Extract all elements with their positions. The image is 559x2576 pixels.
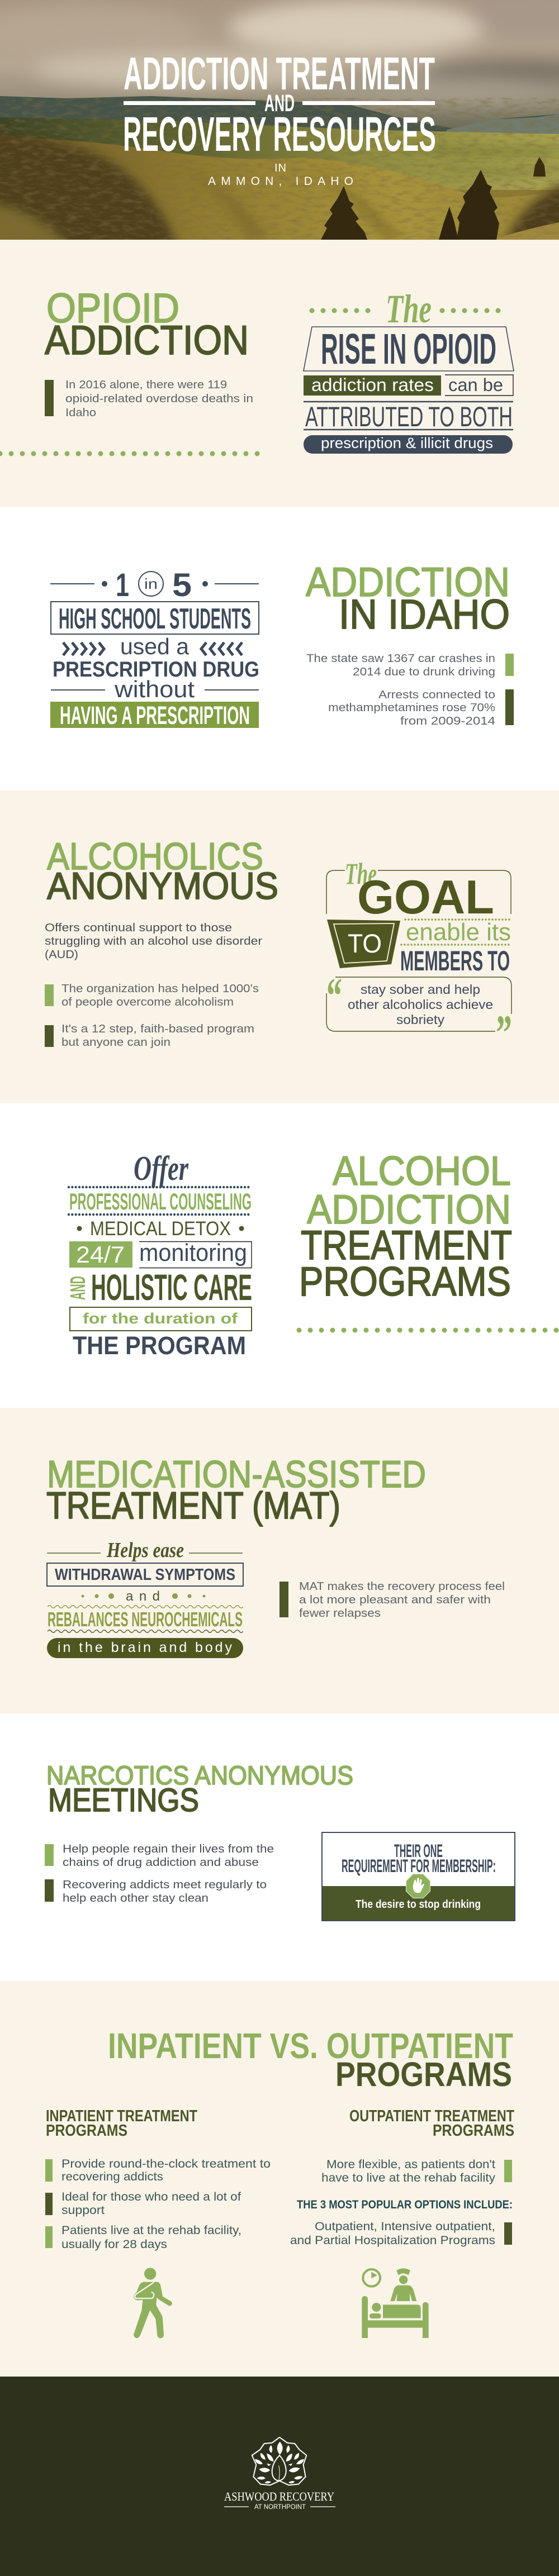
fact: ideal for: support [61,2204,105,2217]
typographic callout: offer: Offer [134,1150,189,1188]
typographic callout: the goal: The [345,857,377,891]
stat: meth arrests: from 2009-2014 [400,715,495,727]
fact: options list: and Partial Hospitalization Programs [290,2234,495,2247]
subheading: inpatient: PROGRAMS [46,2122,127,2140]
heading: alcohol addiction treatment programs: ALCOHOL [333,1149,511,1194]
heading: addiction in Idaho: IN IDAHO [339,591,510,637]
logo: Ashwood Recovery lotus [252,2437,306,2485]
typographic callout: offer: THE PROGRAM [73,1331,246,1360]
stat: overdose deaths: In 2016 alone, there were 119 [65,378,227,391]
stat: meth arrests [328,688,514,727]
typographic callout: 1 in 5: in [144,575,158,592]
typographic callout: rise in opioid [304,287,514,454]
fact: round the clock: Provide round-the-clock treatment to [61,2158,271,2170]
fact: meet regularly: help each other stay clean [63,1892,209,1904]
panel: alcohol addiction treatment programs [0,1103,559,1408]
panel: medication-assisted treatment [0,1408,559,1713]
brand name: ASHWOOD RECOVERY [224,2489,334,2503]
typographic callout: helps ease: Helps ease [106,1539,184,1562]
panel: alcoholics anonymous [0,791,559,1103]
heading: addiction in Idaho [306,560,510,637]
heading: alcoholics anonymous [47,835,278,907]
fact: 12 step program [45,1022,254,1049]
icon: person with arm sling [134,2268,172,2338]
panel: opioid addiction [0,240,559,507]
panel: inpatient vs outpatient [0,1981,559,2377]
typographic callout: the goal: ” [496,1006,512,1061]
fact: ideal for: Ideal for those who need a lot of [61,2191,241,2203]
fact: MAT benefits: MAT makes the recovery process feel [299,1580,505,1593]
heading: alcohol addiction treatment programs [299,1149,512,1304]
typographic callout: helps ease: in the brain and body [58,1640,233,1655]
heading: alcohol addiction treatment programs: TREATMENT [301,1223,512,1268]
fact: more flexible [321,2158,512,2184]
fact: MAT benefits: a lot more pleasant and safer with [299,1593,491,1606]
typographic callout: 1 in 5: 5 [172,567,192,603]
heading: narcotics anonymous meetings: NARCOTICS ANONYMOUS [46,1760,353,1790]
fact: round the clock: recovering addicts [61,2170,163,2183]
heading: narcotics anonymous meetings: MEETINGS [48,1782,199,1818]
typographic callout: the goal: stay sober and help [361,982,480,997]
stat: overdose deaths: opioid-related overdose deaths in [65,392,253,405]
subheading: outpatient: OUTPATIENT TREATMENT [349,2107,514,2125]
location subtitle [208,162,353,188]
typographic callout: the goal: “ [326,968,342,1023]
typographic callout: 1 in 5 [50,567,259,730]
typographic callout: offer: PROFESSIONAL COUNSELING [69,1188,252,1215]
fact: options list [290,2220,512,2247]
typographic callout: the goal: sobriety [396,1012,445,1027]
location subtitle: AMMON, IDAHO [208,175,353,188]
typographic callout: rise in opioid: can be [448,375,503,395]
fact: meet regularly [45,1878,267,1904]
fact: helped thousands: The organization has helped 1000's [61,982,259,995]
fact: MAT benefits [280,1580,505,1620]
fact: MAT benefits: fewer relapses [299,1607,381,1620]
fact: round the clock [45,2158,271,2183]
location subtitle: IN [274,162,286,174]
heading: opioid addiction [45,285,249,363]
heading: medication-assisted treatment [46,1453,426,1527]
typographic callout: 1 in 5: used a [120,634,189,659]
typographic callout: the goal [326,857,512,1061]
heading: alcohol addiction treatment programs: PROGRAMS [299,1259,511,1304]
description: Offers continual support to those [45,921,232,934]
stat: overdose deaths [45,378,253,419]
typographic callout: rise in opioid: addiction rates [311,375,434,395]
typographic callout: helps ease: REBALANCES NEUROCHEMICALS [48,1608,243,1631]
typographic callout: rise in opioid: prescription & illicit drugs [321,435,493,451]
card: requirement for membership: THEIR ONE [394,1841,443,1861]
stat: meth arrests: methamphetamines rose 70% [328,701,495,714]
heading: medication-assisted treatment: MEDICATION-ASSISTED [47,1453,426,1496]
typographic callout: offer: MEDICAL DETOX [90,1218,231,1240]
fact: live at facility: Patients live at the rehab facility, [61,2224,241,2237]
subheading: outpatient [349,2107,514,2140]
typographic callout: offer: for the duration of [83,1310,238,1327]
fact: 12 step program: but anyone can join [61,1036,170,1049]
fact: live at facility: usually for 28 days [61,2238,167,2251]
heading: inpatient vs outpatient programs [108,2026,513,2093]
brand name [224,2489,335,2511]
fact: more flexible: More flexible, as patients don't [326,2158,495,2171]
typographic callout: the goal: TO [348,928,382,958]
typographic callout: 1 in 5: without [114,676,195,702]
description: struggling with an alcohol use disorder [45,935,262,947]
subheading: outpatient: PROGRAMS [433,2122,514,2140]
icon: nurse and hospital bed [362,2268,429,2338]
panel: footer [0,2377,559,2576]
stat: car crashes: 2014 due to drunk driving [353,665,495,678]
heading: inpatient vs outpatient programs: PROGRAMS [335,2055,512,2093]
typographic callout: offer [67,1150,252,1360]
fact: helped thousands: of people overcome alcoholism [61,996,234,1008]
heading: alcoholics anonymous: ANONYMOUS [47,865,278,907]
typographic callout: rise in opioid: The [386,287,432,331]
fact: options list: Outpatient, Intensive outpatient, [315,2220,495,2233]
typographic callout: the goal: GOAL [357,871,494,924]
heading: medication-assisted treatment: TREATMENT (MAT) [46,1484,340,1527]
heading: alcoholics anonymous: ALCOHOLICS [47,835,263,878]
typographic callout: helps ease: and [126,1589,160,1604]
typographic callout: offer: HOLISTIC CARE [91,1266,252,1308]
heading: alcohol addiction treatment programs: ADDICTION [307,1187,511,1232]
stat: overdose deaths: Idaho [65,406,96,419]
label: popular options: THE 3 MOST POPULAR OPTIONS INCLUDE: [297,2198,513,2211]
hero landscape photo [0,0,559,249]
typographic callout: the goal: enable its [406,918,511,946]
card: requirement for membership: The desire to stop drinking [356,1898,481,1911]
panel: addiction in Idaho [0,507,559,791]
panel: hero header [0,0,559,249]
brand name: AT NORTHPOINT [254,2503,306,2511]
fact: regain lives: Help people regain their lives from the [63,1842,274,1855]
stat: car crashes: The state saw 1367 car crashes in [306,652,495,665]
title: AND [264,90,295,117]
heading: narcotics anonymous meetings [46,1760,353,1818]
fact: regain lives: chains of drug addiction and abuse [63,1856,259,1869]
fact: more flexible: have to live at the rehab facility [321,2172,496,2184]
column: outpatient programs [290,2107,514,2338]
typographic callout: 1 in 5: HIGH SCHOOL STUDENTS [59,603,251,635]
fact: regain lives [45,1842,274,1869]
panel: narcotics anonymous meetings [0,1713,559,1981]
typographic callout: offer: monitoring [139,1239,247,1266]
heading: opioid addiction: OPIOID [46,285,179,331]
typographic callout: the goal: other alcoholics achieve [348,997,493,1012]
description: (AUD) [45,948,78,961]
heading: addiction in Idaho: ADDICTION [306,560,510,605]
typographic callout: offer: AND [67,1276,90,1300]
stat: meth arrests: Arrests connected to [378,688,495,701]
title [123,47,436,161]
heading: opioid addiction: ADDICTION [45,318,249,363]
icon: stop hand [406,1874,430,1898]
typographic callout: offer: 24/7 [76,1241,125,1268]
fact: live at facility [45,2224,241,2251]
subheading: inpatient: INPATIENT TREATMENT [46,2107,197,2125]
typographic callout: 1 in 5: 1 [116,567,129,603]
fact: 12 step program: It's a 12 step, faith-based program [61,1022,254,1035]
fact: meet regularly: Recovering addicts meet regularly to [63,1878,267,1891]
fact: ideal for [45,2191,241,2217]
card: requirement for membership [322,1832,515,1921]
typographic callout: helps ease: WITHDRAWAL SYMPTOMS [55,1566,235,1584]
fact: helped thousands [45,982,259,1008]
subheading: inpatient [46,2107,197,2140]
stat: car crashes [306,652,514,678]
column: inpatient programs [45,2107,271,2338]
typographic callout: helps ease [47,1539,243,1658]
typographic callout: 1 in 5: HAVING A PRESCRIPTION [60,701,250,730]
typographic callout: 1 in 5: PRESCRIPTION DRUG [53,658,259,682]
description [45,921,262,961]
